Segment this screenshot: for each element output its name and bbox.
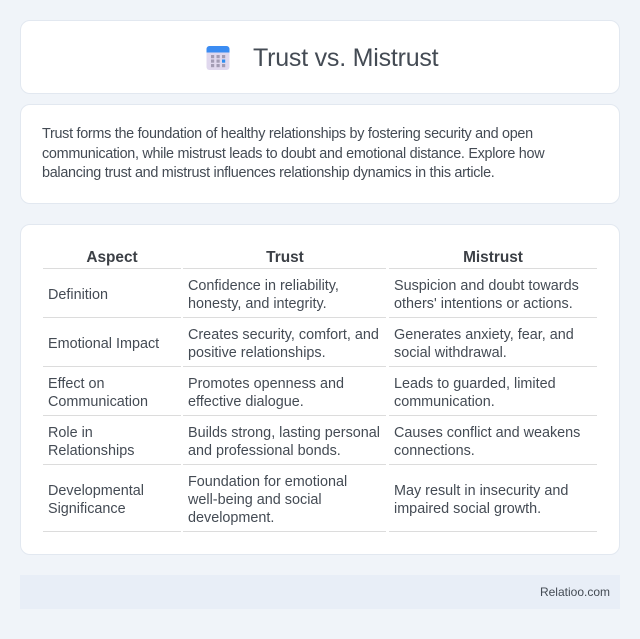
table: Creates security, comfort, and bbox=[188, 327, 379, 343]
header panel bbox=[20, 20, 620, 94]
table: Role in bbox=[48, 425, 93, 441]
table: Effect on bbox=[48, 376, 105, 392]
intro panel bbox=[20, 104, 620, 204]
table: Leads to guarded, limited bbox=[394, 376, 556, 392]
table: Significance bbox=[48, 501, 126, 517]
table: connections. bbox=[394, 443, 475, 459]
title: Trust vs. Mistrust bbox=[253, 44, 438, 72]
table: Confidence in reliability, bbox=[188, 278, 339, 294]
intro text: balancing trust and mistrust influences relationship dynamics in this article. bbox=[42, 165, 494, 181]
icon: calendar bbox=[206, 46, 230, 70]
table: effective dialogue. bbox=[188, 394, 304, 410]
table: Causes conflict and weakens bbox=[394, 425, 580, 441]
table: social withdrawal. bbox=[394, 345, 507, 361]
table: Definition bbox=[48, 287, 108, 303]
table: positive relationships. bbox=[188, 345, 326, 361]
table: development. bbox=[188, 510, 274, 526]
table: well-being and social bbox=[188, 492, 322, 508]
table: Suspicion and doubt towards bbox=[394, 278, 579, 294]
table: Builds strong, lasting personal bbox=[188, 425, 380, 441]
table: honesty, and integrity. bbox=[188, 296, 327, 312]
table: May result in insecurity and bbox=[394, 483, 568, 499]
table: communication. bbox=[394, 394, 495, 410]
table: Foundation for emotional bbox=[188, 474, 347, 490]
table: Relationships bbox=[48, 443, 134, 459]
panel: comparison table bbox=[20, 224, 620, 555]
table: Trust bbox=[266, 249, 304, 266]
table: Communication bbox=[48, 394, 148, 410]
intro text: communication, while mistrust leads to doubt and emotional distance. Explore how bbox=[42, 146, 544, 162]
table: Promotes openness and bbox=[188, 376, 344, 392]
table: and professional bonds. bbox=[188, 443, 341, 459]
table: Generates anxiety, fear, and bbox=[394, 327, 574, 343]
table: Emotional Impact bbox=[48, 336, 159, 352]
table: others' intentions or actions. bbox=[394, 296, 573, 312]
table: Mistrust bbox=[463, 249, 523, 266]
intro text bbox=[42, 126, 545, 181]
intro text: Trust forms the foundation of healthy relationships by fostering security and open bbox=[42, 126, 533, 142]
table: Developmental bbox=[48, 483, 144, 499]
footer text: Relatioo.com bbox=[540, 585, 610, 599]
footer bar bbox=[20, 575, 620, 609]
table: Aspect bbox=[86, 249, 138, 266]
table: impaired social growth. bbox=[394, 501, 541, 517]
